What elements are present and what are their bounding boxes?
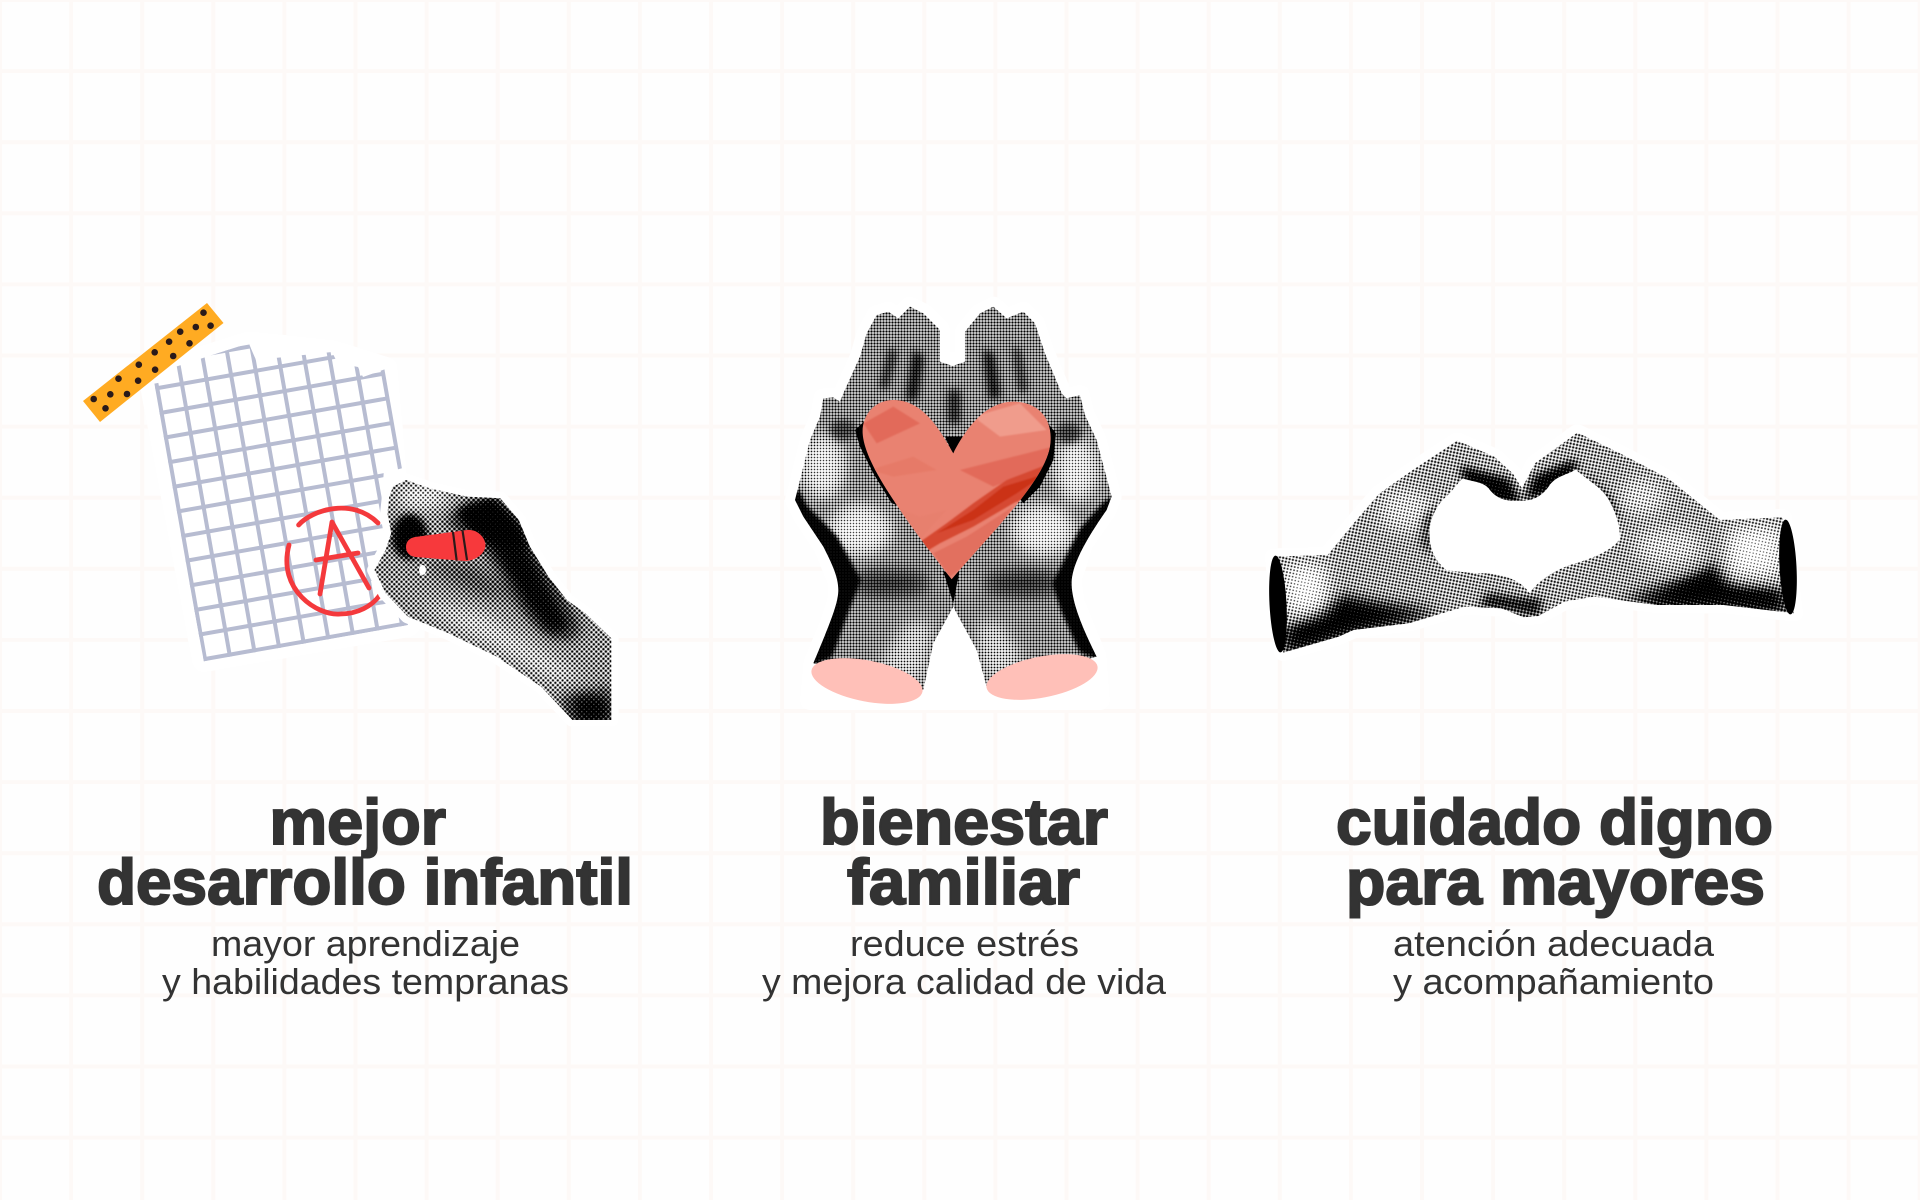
- black shadow edges: [780, 490, 1123, 670]
- text block: [762, 923, 1167, 1002]
- panel: bienestar familiar: [762, 290, 1167, 1002]
- heading: bienestar: [820, 786, 1108, 858]
- icon: halftone hand with crayon: [367, 480, 612, 720]
- text block: reduce estrés: [850, 923, 1079, 964]
- icon: graph paper: [154, 344, 408, 662]
- heading: para mayores: [1346, 846, 1765, 918]
- heading: mejor: [270, 786, 446, 858]
- icon: red crayon: [406, 530, 486, 575]
- icon: left black cuff: [1267, 555, 1289, 653]
- illustration: paper, tape and writing hand: [83, 303, 630, 730]
- icon: right black cuff: [1777, 519, 1799, 615]
- heading: desarrollo infantil: [97, 846, 633, 918]
- heading: [1336, 786, 1773, 918]
- icon: pink right wrist: [983, 646, 1101, 708]
- text block: y habilidades tempranas: [162, 961, 569, 1002]
- heading: [820, 786, 1108, 918]
- icon: halftone cupped hands: [795, 306, 1112, 690]
- panel: mejor desarrollo infantil: [83, 303, 633, 1002]
- heading: familiar: [847, 846, 1080, 918]
- heading: cuidado digno: [1336, 786, 1773, 858]
- text block: y acompañamiento: [1393, 961, 1714, 1002]
- icon: halftone hands: [1277, 432, 1794, 653]
- illustration: hands forming a heart: [1269, 433, 1797, 653]
- text block: atención adecuada: [1393, 923, 1715, 964]
- icon: pink left wrist: [808, 650, 926, 712]
- panel: cuidado digno para mayores: [1260, 420, 1820, 1002]
- text block: [1393, 923, 1715, 1002]
- illustration: open hands holding a heart: [795, 306, 1112, 704]
- text block: mayor aprendizaje: [211, 923, 520, 964]
- icon: red circled letter A: [287, 508, 380, 614]
- icon: yellow dotted tape: [83, 303, 224, 422]
- text block: [162, 923, 569, 1002]
- text block: y mejora calidad de vida: [762, 961, 1167, 1002]
- icon: crumpled paper heart: [855, 397, 1057, 603]
- heading: [97, 786, 633, 918]
